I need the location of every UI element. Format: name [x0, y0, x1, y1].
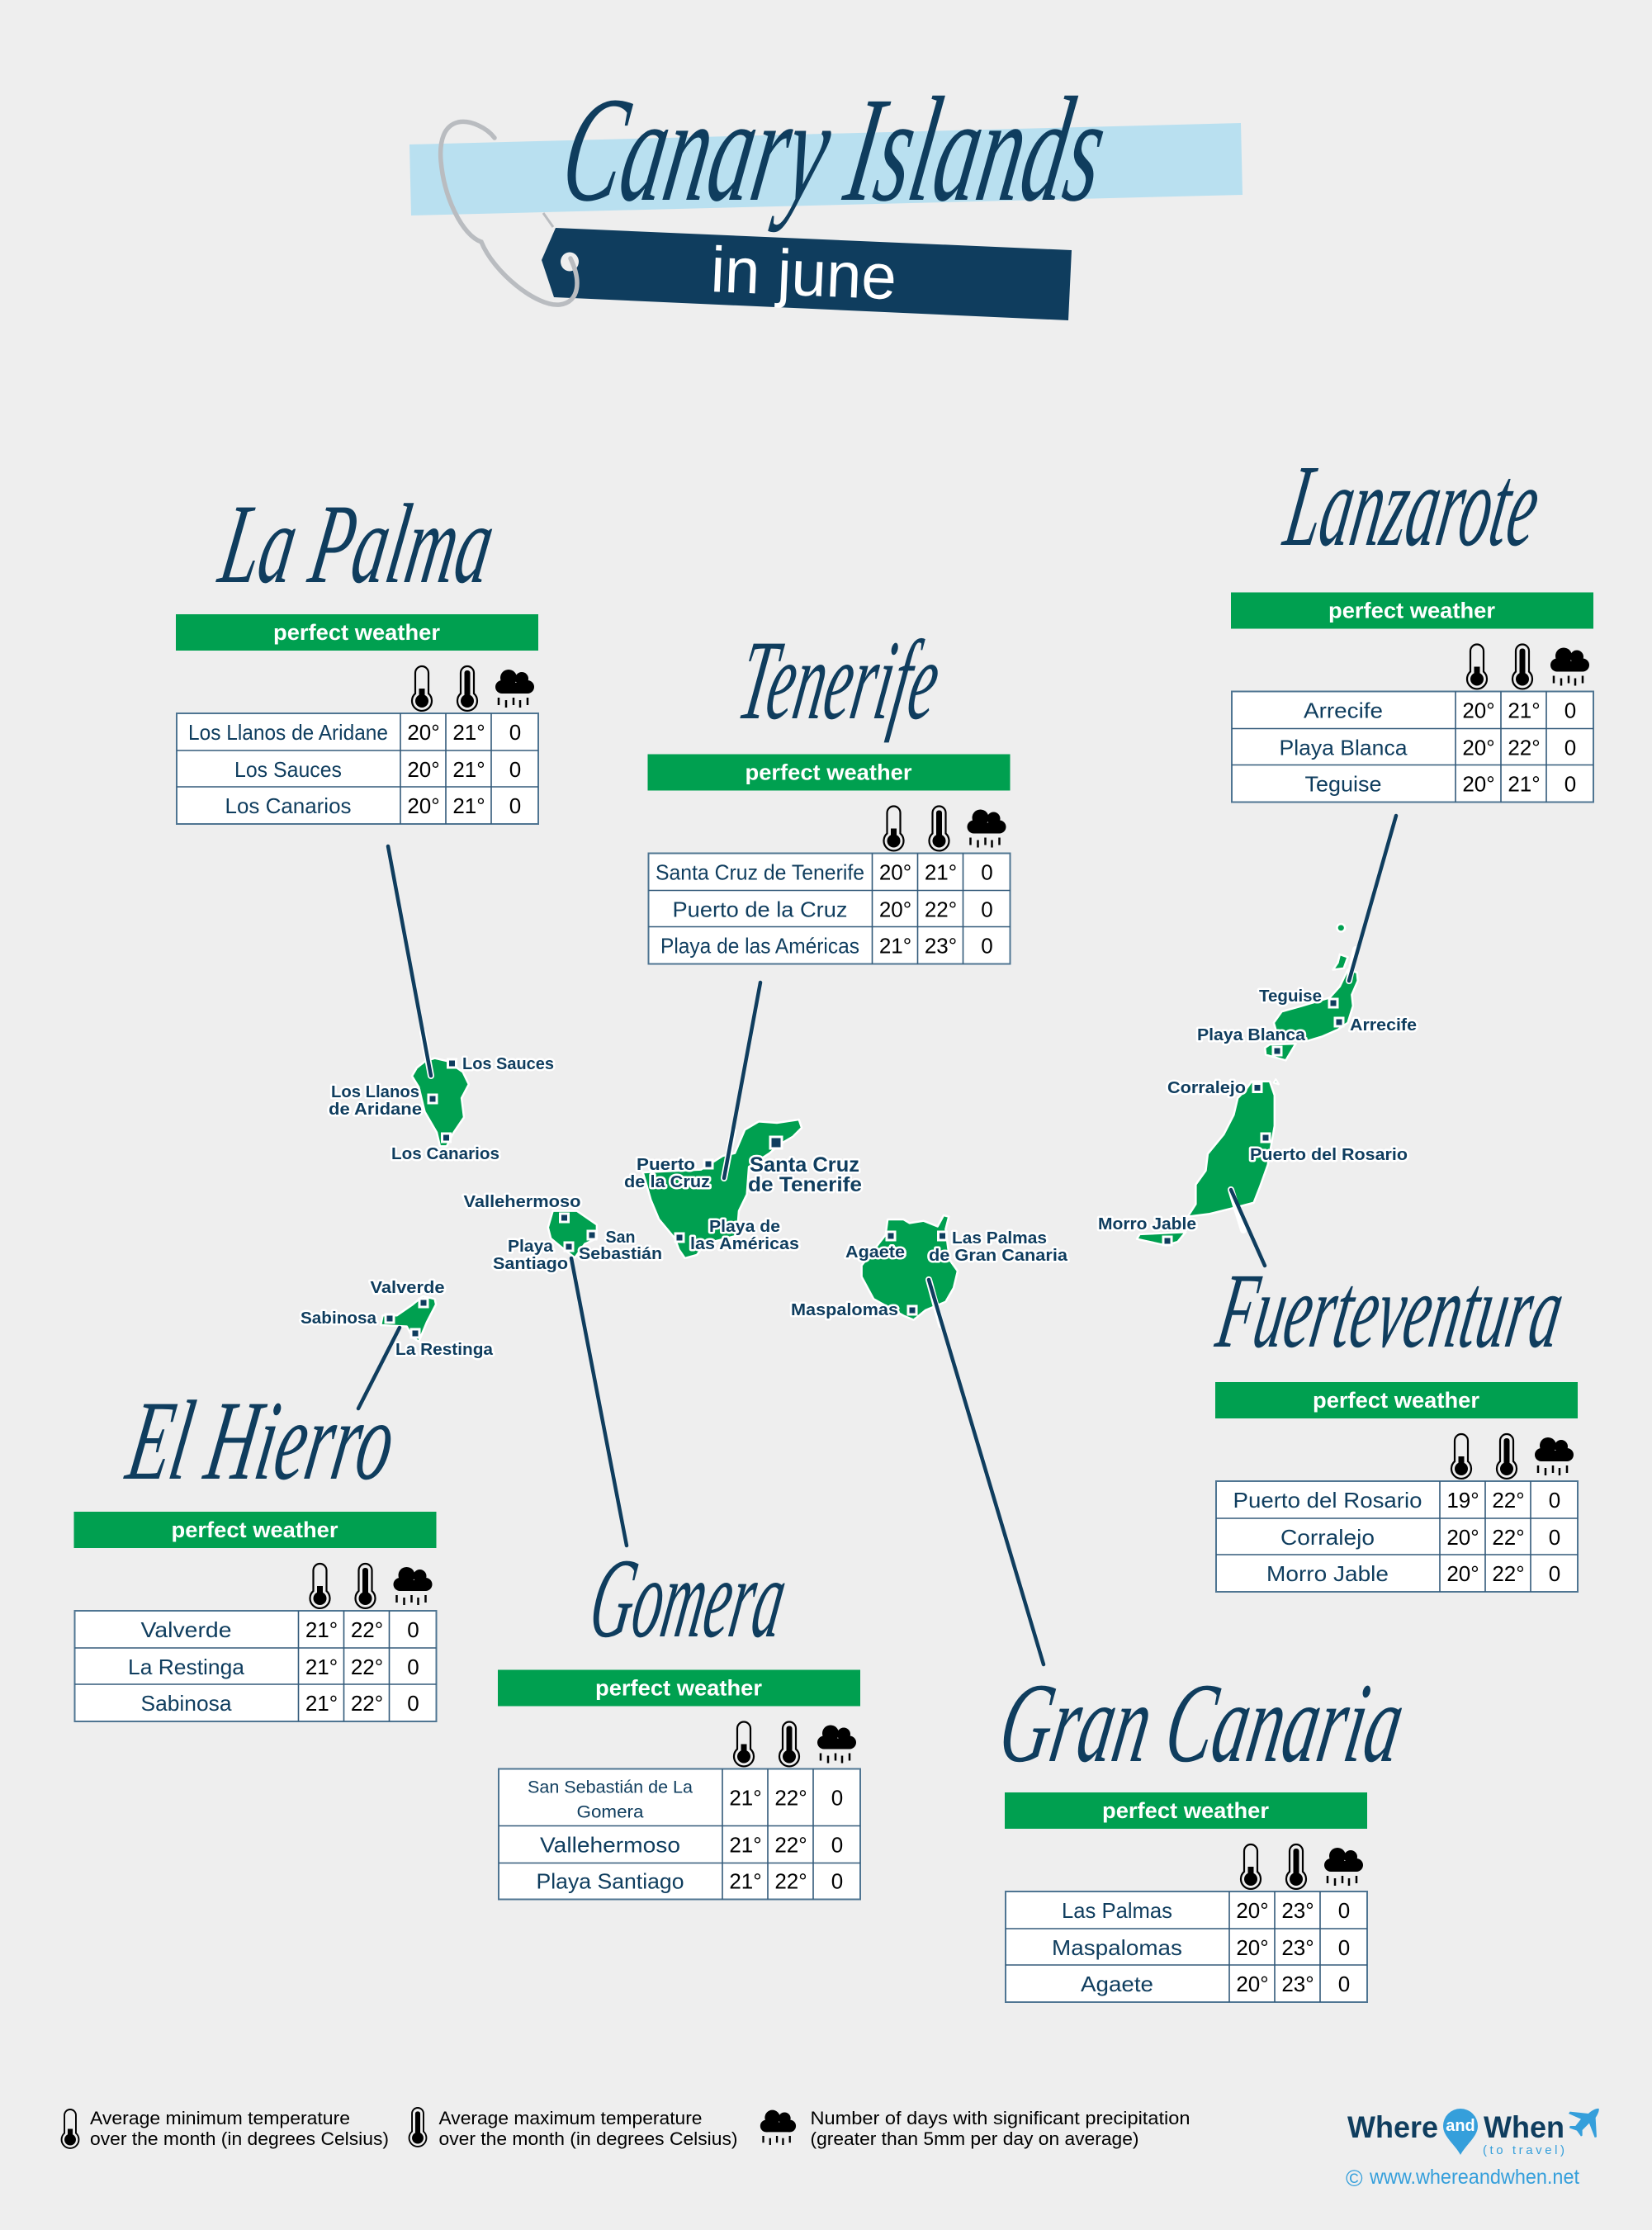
- island: Tenerife: [643, 1120, 802, 1258]
- city labels: de Tenerife: [748, 1173, 862, 1196]
- table: Puerto del Rosario: [1233, 1488, 1422, 1513]
- icon: min thermometer: [883, 806, 903, 850]
- icon: rain cloud: [817, 1726, 856, 1764]
- icon: plane: [1569, 2109, 1599, 2138]
- legend text: max temperature: over the month (in degrees Celsius): [439, 2128, 738, 2149]
- city labels: Playa: [508, 1238, 554, 1256]
- website: www.whereandwhen.net: [1369, 2166, 1579, 2189]
- table: 20°: [407, 793, 440, 818]
- icon: min thermometer: [1241, 1844, 1261, 1889]
- icon: max thermometer: [930, 806, 949, 850]
- table: 0: [407, 1617, 419, 1642]
- table: Playa Blanca: [1280, 735, 1408, 760]
- icon: min thermometer: [1451, 1434, 1471, 1479]
- table: Los Canarios: [225, 793, 352, 818]
- table: Arrecife: [1304, 698, 1383, 723]
- heading: Gomera: Gomera: [582, 1536, 796, 1662]
- icon: min thermometer: [1467, 644, 1487, 689]
- city markers: [386, 999, 1343, 1338]
- table: Teguise: [1304, 771, 1382, 796]
- table: Playa Santiago: [537, 1869, 684, 1894]
- table: 23°: [1281, 1935, 1314, 1960]
- table: Las Palmas: [1062, 1898, 1172, 1923]
- legend text: max temperature: [439, 2108, 738, 2149]
- table: 20°: [1236, 1935, 1269, 1960]
- table: 21°: [1508, 771, 1541, 796]
- icon: max thermometer: [779, 1722, 799, 1766]
- table: 0: [831, 1785, 843, 1810]
- subtitle: in june: [709, 233, 898, 313]
- table: 21°: [452, 757, 485, 782]
- table: 20°: [879, 860, 911, 885]
- banner: [74, 1512, 436, 1548]
- table: 0: [1564, 735, 1576, 760]
- legend icon: min thermometer: [62, 2109, 78, 2148]
- table: 20°: [1462, 771, 1495, 796]
- city labels: Los Sauces: [462, 1055, 554, 1073]
- table: La Restinga: [128, 1655, 245, 1679]
- table: 21°: [452, 720, 485, 745]
- banner: perfect weather: [172, 1517, 338, 1542]
- legend: [62, 2108, 1190, 2149]
- city labels: Puerto del Rosario: [1250, 1146, 1408, 1164]
- logo word: and: and: [1446, 2117, 1475, 2135]
- heading: Gran Canaria: Gran Canaria: [992, 1660, 1413, 1787]
- table: 0: [509, 757, 521, 782]
- table: 21°: [729, 1869, 762, 1894]
- table: 0: [1549, 1561, 1560, 1586]
- table: [1006, 1891, 1367, 2002]
- table: 22°: [925, 897, 957, 921]
- table: 22°: [1492, 1561, 1525, 1586]
- table: 20°: [407, 720, 440, 745]
- table: Valverde: [140, 1617, 231, 1642]
- legend text: min temperature: over the month (in degrees Celsius): [90, 2128, 389, 2149]
- island: El Hierro: [381, 1296, 436, 1342]
- table: 0: [981, 933, 993, 958]
- legend text: max temperature: Average maximum temperature: [439, 2108, 702, 2128]
- table: 21°: [305, 1617, 338, 1642]
- banner: [647, 755, 1011, 791]
- table: Morro Jable: [1266, 1561, 1389, 1586]
- table: Santa Cruz de Tenerife: [656, 860, 864, 885]
- city labels: Santa Cruz: [750, 1153, 859, 1177]
- table: 0: [831, 1833, 843, 1858]
- legend text: precipitation: (greater than 5mm per day on average): [811, 2128, 1139, 2149]
- icon: rain cloud: [393, 1567, 433, 1605]
- city labels: Arrecife: [1350, 1016, 1417, 1035]
- table: 0: [407, 1655, 419, 1679]
- table: 0: [1338, 1898, 1350, 1923]
- heading: La Palma: La Palma: [211, 481, 504, 608]
- banner: perfect weather: [273, 620, 440, 645]
- table: Vallehermoso: [540, 1833, 680, 1858]
- tagline: (to travel): [1483, 2143, 1564, 2157]
- table: 0: [981, 897, 993, 921]
- icon: rain cloud: [1324, 1848, 1363, 1886]
- table: Los Sauces: [234, 757, 342, 782]
- city labels: Santiago: [493, 1255, 568, 1273]
- city labels: Puerto: [637, 1156, 695, 1174]
- table: 0: [1338, 1972, 1350, 1996]
- table: 21°: [305, 1655, 338, 1679]
- table: 20°: [1446, 1525, 1479, 1550]
- banner: [1005, 1792, 1367, 1829]
- table: 22°: [351, 1655, 383, 1679]
- city labels: Agaete: [845, 1243, 905, 1262]
- legend text: precipitation: [811, 2108, 1190, 2149]
- table: 22°: [1492, 1525, 1525, 1550]
- table: 21°: [452, 793, 485, 818]
- icon: max thermometer: [1512, 644, 1532, 689]
- connector: Lanzarote: [1349, 816, 1396, 981]
- table: 22°: [351, 1691, 383, 1716]
- main title: Canary Islands: [551, 66, 1118, 233]
- table: [1216, 1481, 1578, 1592]
- city labels: San: [606, 1229, 636, 1247]
- city labels: de Gran Canaria: [929, 1247, 1068, 1265]
- table: 0: [831, 1869, 843, 1894]
- icon: copyright: ©: [1346, 2166, 1363, 2191]
- logo: [1346, 2109, 1599, 2191]
- table: Puerto de la Cruz: [672, 897, 847, 921]
- connector: El Hierro: [358, 1328, 400, 1409]
- table: 21°: [729, 1833, 762, 1858]
- legend icon: rain cloud: [760, 2110, 796, 2145]
- city labels: las Américas: [690, 1235, 799, 1253]
- island: Lanzarote: [1265, 924, 1358, 1060]
- map of islands: [301, 816, 1417, 1664]
- table: Maspalomas: [1052, 1935, 1182, 1960]
- city labels: Los Canarios: [391, 1145, 499, 1163]
- table: 0: [509, 720, 521, 745]
- table: 0: [509, 793, 521, 818]
- connector: Gran Canaria: [929, 1280, 1044, 1664]
- table: 20°: [407, 757, 440, 782]
- legend text: precipitation: Number of days with significant precipitation: [811, 2108, 1190, 2128]
- connector: La Palma: [388, 846, 431, 1076]
- heading: El Hierro: El Hierro: [118, 1378, 405, 1504]
- city labels: de la Cruz: [624, 1173, 710, 1191]
- logo word: Where: Where: [1347, 2110, 1438, 2144]
- panel: La Palma: [176, 481, 538, 824]
- table: 22°: [1492, 1488, 1525, 1513]
- table: 21°: [729, 1785, 762, 1810]
- table: 23°: [1281, 1898, 1314, 1923]
- table: [499, 1768, 860, 1899]
- city labels: Teguise: [1259, 987, 1322, 1006]
- table: 20°: [1236, 1898, 1269, 1923]
- table: [649, 854, 1011, 964]
- table: 20°: [879, 897, 911, 921]
- icon: min thermometer: [734, 1722, 754, 1766]
- icon: rain cloud: [1535, 1437, 1574, 1475]
- table: 0: [1549, 1488, 1560, 1513]
- icon: rain cloud: [1550, 647, 1589, 685]
- city labels: Valverde: [370, 1279, 444, 1297]
- city labels: Sebastián: [579, 1245, 662, 1263]
- icon: max thermometer: [1497, 1434, 1517, 1479]
- banner: [498, 1669, 860, 1706]
- table: Sabinosa: [140, 1691, 232, 1716]
- table: 20°: [1462, 735, 1495, 760]
- table: 22°: [351, 1617, 383, 1642]
- table: 22°: [774, 1869, 807, 1894]
- connector: Gomera: [571, 1258, 627, 1546]
- island: La Palma: [412, 1058, 469, 1146]
- table: 23°: [1281, 1972, 1314, 1996]
- legend icon: max thermometer: [409, 2108, 426, 2147]
- table: 22°: [1508, 735, 1541, 760]
- city labels: Morro Jable: [1098, 1215, 1196, 1233]
- table: [1232, 692, 1593, 803]
- table: 21°: [1508, 698, 1541, 723]
- heading: Tenerife: Tenerife: [731, 618, 949, 744]
- light blue title band: [409, 123, 1243, 215]
- table: 0: [981, 860, 993, 885]
- panel: Lanzarote: [1231, 440, 1593, 803]
- table: 20°: [1462, 698, 1495, 723]
- table: Gomera: [576, 1803, 644, 1821]
- legend text: min temperature: Average minimum temperature: [90, 2108, 350, 2128]
- legend text: min temperature: [90, 2108, 389, 2149]
- city labels: Playa Blanca: [1197, 1026, 1306, 1044]
- city labels: Corralejo: [1167, 1079, 1246, 1097]
- grey string: [441, 121, 577, 305]
- icon: min thermometer: [412, 666, 432, 711]
- table: 0: [1549, 1525, 1560, 1550]
- table: 21°: [879, 933, 911, 958]
- table: 22°: [774, 1785, 807, 1810]
- table: 20°: [1236, 1972, 1269, 1996]
- tag string stub: [543, 213, 553, 227]
- icon: rain cloud: [495, 670, 534, 708]
- city labels: Sabinosa: [301, 1309, 377, 1328]
- icon: max thermometer: [457, 666, 477, 711]
- panel: Tenerife: [647, 618, 1011, 964]
- city labels: Playa de: [709, 1218, 780, 1236]
- city labels: [301, 987, 1417, 1359]
- table: Agaete: [1081, 1972, 1153, 1996]
- banner: [1215, 1382, 1578, 1418]
- banner: [1231, 593, 1593, 629]
- banner: perfect weather: [1328, 598, 1495, 623]
- table: Playa de las Américas: [660, 933, 859, 958]
- connector: Fuerteventura: [1231, 1190, 1265, 1266]
- title block: [409, 66, 1243, 320]
- city labels: de Aridane: [329, 1101, 422, 1119]
- tag hole: [561, 253, 579, 271]
- banner: perfect weather: [745, 760, 912, 784]
- banner: perfect weather: [1102, 1798, 1269, 1823]
- banner: [176, 614, 538, 651]
- table: 0: [407, 1691, 419, 1716]
- icon: min thermometer: [310, 1564, 330, 1608]
- connector: Tenerife: [724, 982, 760, 1178]
- panel: El Hierro: [74, 1378, 436, 1721]
- table: 19°: [1446, 1488, 1479, 1513]
- banner: perfect weather: [595, 1676, 762, 1701]
- island: Gran Canaria: [862, 1215, 958, 1320]
- city labels: Los Llanos: [331, 1083, 419, 1101]
- logo pin: [1443, 2109, 1478, 2155]
- table: Los Llanos de Aridane: [188, 720, 388, 745]
- table: 21°: [305, 1691, 338, 1716]
- table: 0: [1338, 1935, 1350, 1960]
- city labels: La Restinga: [395, 1341, 494, 1359]
- icon: max thermometer: [1286, 1844, 1306, 1889]
- icon: max thermometer: [355, 1564, 375, 1608]
- island: Fuerteventura: [1137, 1079, 1279, 1245]
- navy tag: [542, 228, 1072, 320]
- table: Corralejo: [1280, 1525, 1375, 1550]
- island: Gomera: [548, 1211, 597, 1257]
- table: 20°: [1446, 1561, 1479, 1586]
- table: San Sebastián de La: [528, 1778, 693, 1797]
- city labels: Vallehermoso: [464, 1193, 581, 1211]
- city labels: Las Palmas: [952, 1229, 1047, 1248]
- table: 22°: [774, 1833, 807, 1858]
- table: 0: [1564, 771, 1576, 796]
- table: [177, 713, 538, 824]
- table: 0: [1564, 698, 1576, 723]
- banner: perfect weather: [1313, 1388, 1479, 1413]
- table: [74, 1611, 436, 1721]
- logo word: When: When: [1484, 2110, 1564, 2144]
- city labels: Maspalomas: [791, 1301, 898, 1319]
- table: 23°: [925, 933, 957, 958]
- panel: Gomera: [498, 1536, 860, 1899]
- icon: rain cloud: [968, 809, 1006, 847]
- table: 21°: [925, 860, 957, 885]
- panel: Fuerteventura: [1209, 1252, 1578, 1592]
- panel: Gran Canaria: [992, 1660, 1413, 2002]
